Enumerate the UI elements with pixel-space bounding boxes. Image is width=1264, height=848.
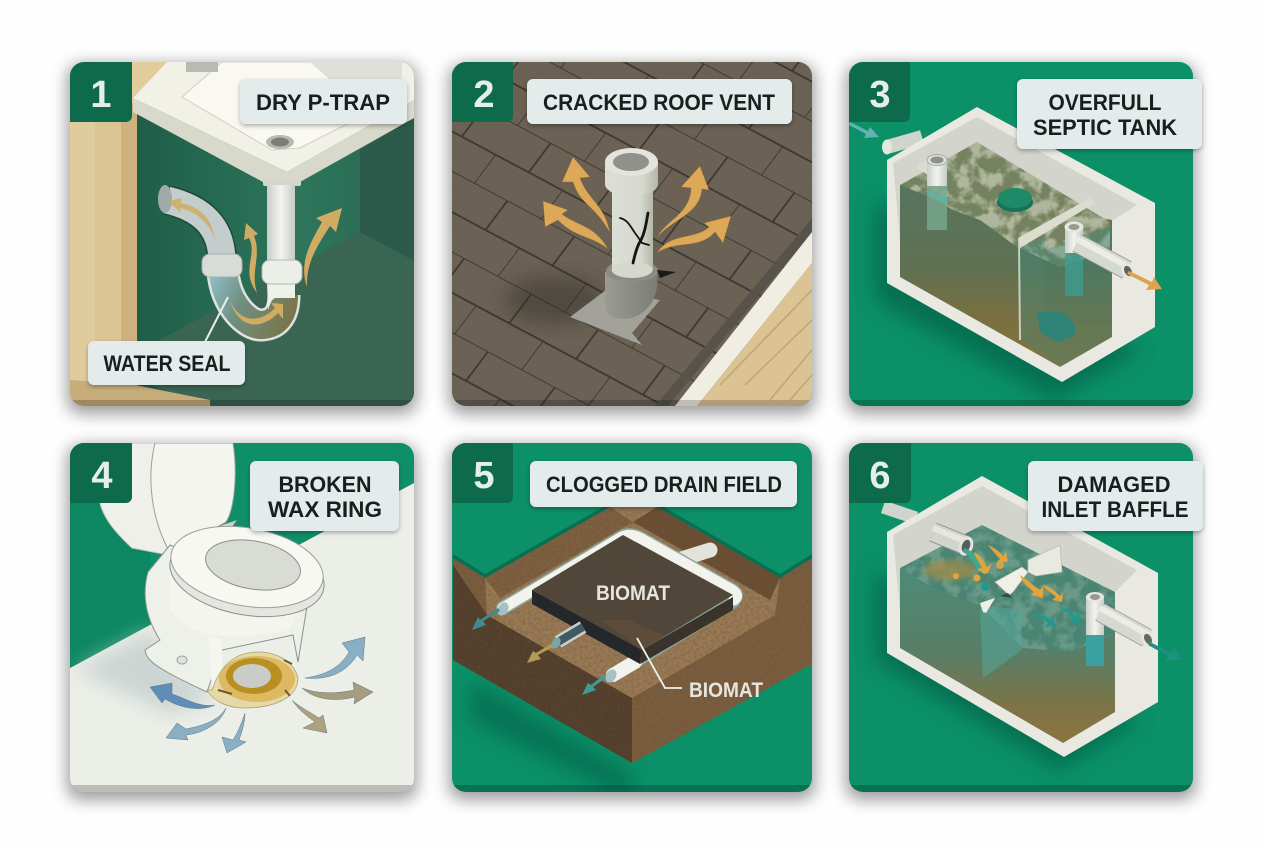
toilet bowl and base <box>145 515 331 692</box>
crack in the vent pipe <box>620 213 649 263</box>
wax ring <box>207 652 298 708</box>
step number 2: 2 <box>473 74 495 116</box>
label: clogged drain field: CLOGGED DRAIN FIELD <box>546 472 782 497</box>
illustration: drain field cross section <box>452 443 812 800</box>
label: damaged inlet baffle: INLET BAFFLE <box>1042 497 1188 522</box>
illustration: shingled roof with cracked vent <box>452 62 812 406</box>
gas arrows: escaping from the crack <box>543 157 731 253</box>
panel 2: cracked roof vent <box>449 62 815 414</box>
broken baffle wall <box>980 545 1062 678</box>
toilet tank and lid <box>100 443 237 556</box>
panel 3: overfull septic tank <box>846 62 1202 414</box>
step number 5: 5 <box>473 455 495 497</box>
label: overfull septic tank: SEPTIC TANK <box>1033 115 1177 140</box>
label: overfull septic tank <box>1017 79 1202 149</box>
collapsed centre pipe <box>550 627 583 650</box>
biomat layer <box>532 535 733 664</box>
step number 6 <box>849 443 911 503</box>
label: clogged drain field <box>530 461 797 507</box>
label: damaged inlet baffle: DAMAGED <box>1058 472 1170 497</box>
illustration: septic tank with damaged baffle <box>849 443 1193 792</box>
illustration: overfull tank cutaway <box>849 62 1193 406</box>
label: dry p-trap <box>240 79 407 124</box>
panel 4: broken wax ring <box>67 443 417 800</box>
label: dry p-trap: DRY P-TRAP <box>256 90 390 115</box>
floating scum lid <box>997 188 1033 212</box>
illustration: toilet on a failed wax ring <box>70 443 414 792</box>
step number 3 <box>849 62 910 122</box>
label: cracked roof vent <box>527 79 792 124</box>
step number 1: 1 <box>90 74 112 116</box>
step number 3: 3 <box>869 74 891 116</box>
step number 1 <box>70 62 132 122</box>
airflow arrows: sewer gas rising <box>168 198 342 324</box>
illustration: sink and p-trap under-sink scene <box>70 62 414 406</box>
step number 5 <box>452 443 513 503</box>
label: broken wax ring: BROKEN <box>278 472 372 497</box>
label: overfull septic tank: OVERFULL <box>1048 90 1162 115</box>
arrow: effluent out <box>1148 642 1182 661</box>
label: damaged inlet baffle <box>1028 461 1203 531</box>
outlet pipe <box>1037 222 1138 342</box>
step number 4: 4 <box>91 455 113 497</box>
drain pipes around the biomat <box>503 535 737 675</box>
text: biomat on mat: BIOMAT <box>596 582 670 605</box>
arrow: wastewater in <box>849 122 879 138</box>
label: broken wax ring <box>250 461 399 531</box>
panel 1: dry p-trap <box>67 62 417 414</box>
label: broken wax ring: WAX RING <box>268 497 382 522</box>
arrows: sewer gas leaking from the ring <box>150 637 373 753</box>
arrow: effluent out <box>1127 271 1162 290</box>
inlet pipe <box>923 154 948 230</box>
step number 2 <box>452 62 513 122</box>
outlet pipe <box>1086 592 1158 666</box>
panel 6: damaged inlet baffle <box>846 443 1203 800</box>
arrows: disturbed flow through baffle <box>953 545 1080 627</box>
step number 4 <box>70 443 132 503</box>
callout: water seal <box>88 341 245 385</box>
callout: water seal: WATER SEAL <box>104 351 230 376</box>
inlet pipe <box>933 528 985 572</box>
arrows: effluent leaving the pipes <box>472 608 606 695</box>
panel 5: clogged drain field <box>449 443 815 800</box>
step number 6: 6 <box>869 455 891 497</box>
label: cracked roof vent: CRACKED ROOF VENT <box>543 90 776 115</box>
leader line to biomat label <box>637 638 682 688</box>
text: biomat callout: BIOMAT <box>689 679 763 702</box>
